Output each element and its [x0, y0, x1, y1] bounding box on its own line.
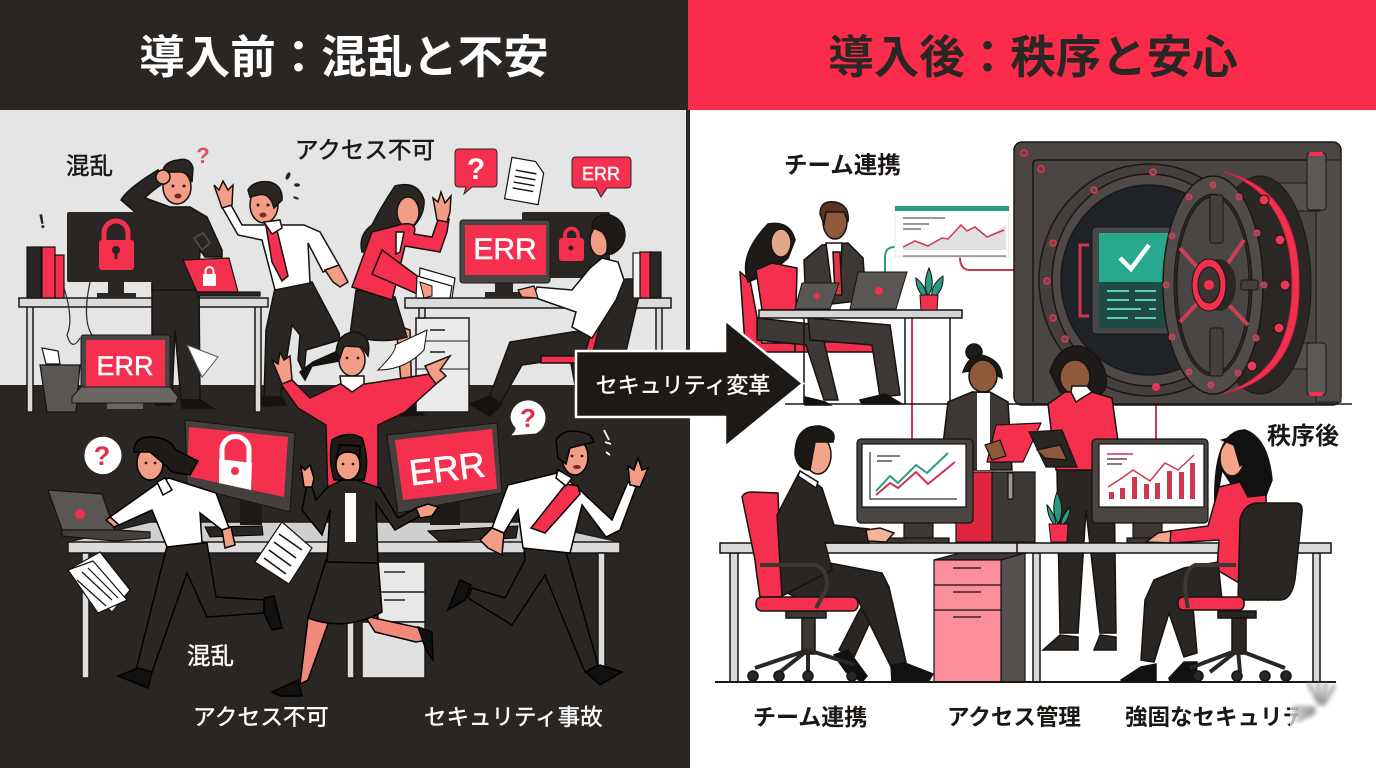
arrow: security transformation: [576, 320, 803, 447]
speech bubble: white left: [84, 436, 122, 475]
hand on paper: [420, 282, 432, 298]
right desk: [405, 298, 671, 412]
speech bubble: white right: [510, 400, 546, 436]
flying paper: [378, 330, 427, 370]
label: order after: 秩序後: [1267, 423, 1339, 450]
monitor: big lock: [185, 420, 295, 537]
panel: after: [688, 0, 1376, 744]
standing woman in jacket: [940, 344, 1012, 470]
monitor: ERR: ERR: [473, 233, 537, 266]
team desk group: [740, 202, 902, 405]
laptop: red: [183, 258, 260, 296]
monitor: ERR floor: ERR: [96, 351, 154, 381]
monitor: lock behind: [522, 212, 610, 278]
monitor: big ERR: ERR: [407, 444, 487, 493]
speech bubble: question: [455, 149, 497, 194]
connectors: [885, 247, 1156, 440]
pink cabinet: [934, 553, 1025, 682]
flying paper center: [255, 522, 312, 584]
left desk: [19, 298, 268, 412]
arrow: security transformation: セキュリティ変革: [596, 373, 770, 398]
pc tower: [956, 472, 1035, 542]
sweat drops: [284, 172, 300, 200]
tablet red: [985, 423, 1041, 462]
team chair: [740, 272, 795, 352]
label: no access: アクセス不可: [295, 137, 435, 163]
trash can: [40, 348, 80, 412]
cable: [64, 282, 92, 344]
floor line bottom: [715, 681, 1336, 683]
paper plane: [187, 345, 218, 377]
seated woman right: [1121, 430, 1302, 682]
label: team collaboration top: チーム連携: [784, 152, 901, 178]
binders right: [633, 252, 661, 298]
panel: before: [0, 0, 690, 768]
header: after: [688, 0, 1376, 110]
papers left: [68, 552, 130, 613]
monitor: lock: [67, 212, 167, 298]
team woman: [757, 318, 838, 400]
header: before: 導入前：混乱と不安: [139, 32, 549, 83]
woman with ponytail running: [106, 437, 282, 688]
woman in dark suit center: [272, 434, 438, 696]
speech bubble: ERR: ERR: [582, 164, 620, 184]
binders: [27, 247, 64, 298]
speech bubble: ERR: [572, 157, 631, 197]
clipboard: [1029, 430, 1077, 467]
label: confusion: 混乱: [66, 153, 113, 179]
laptops: [795, 272, 907, 309]
exclamation mark: !: [37, 211, 47, 233]
label: access management: アクセス管理: [947, 705, 1081, 730]
plant lower: [1047, 492, 1070, 542]
label: strong security: 強固なセキュリティ: [1125, 705, 1326, 730]
keyboard hand: [518, 286, 538, 298]
monitor: ERR floor: [72, 335, 178, 409]
man in white shirt running: [214, 181, 348, 406]
plant: [916, 268, 943, 310]
label: security incident: セキュリティ事故: [424, 705, 603, 730]
team desk: [759, 310, 962, 404]
monitor: ERR: [460, 220, 550, 298]
watermark sparkle: [1290, 684, 1348, 744]
standing woman in red: [1043, 346, 1122, 650]
paper: [505, 157, 545, 205]
label: team collaboration bottom: チーム連携: [753, 704, 867, 730]
man in red sweater: [272, 332, 450, 500]
monitor: chart left: [857, 439, 973, 543]
header: after: 導入後：秩序と安心: [828, 32, 1238, 83]
desk lower: [68, 522, 620, 678]
header: before: [0, 0, 688, 110]
vault: [1014, 142, 1341, 405]
label: no access white: アクセス不可: [193, 704, 329, 730]
paper stack: [416, 268, 455, 298]
lower desk: [720, 543, 1331, 682]
floor line top: [785, 403, 1352, 405]
man in white shirt right: [448, 431, 648, 685]
team man: [808, 318, 900, 397]
man holding head: [121, 159, 222, 408]
laptop: dark: [48, 490, 150, 541]
seated man: [470, 215, 643, 416]
monitor: big ERR: [387, 423, 518, 542]
speech bubble: white right: ?: [520, 403, 536, 433]
label: confusion white: 混乱: [187, 643, 234, 669]
monitor: chart right: [1092, 439, 1208, 543]
question mark: ?: [196, 143, 210, 168]
woman in red jacket: [300, 180, 451, 416]
chart card: [895, 206, 1009, 257]
seated man left: [742, 426, 933, 682]
sweat drops right: [604, 430, 611, 455]
speech bubble: white left: ?: [94, 441, 110, 471]
speech bubble: question: ?: [467, 153, 485, 186]
